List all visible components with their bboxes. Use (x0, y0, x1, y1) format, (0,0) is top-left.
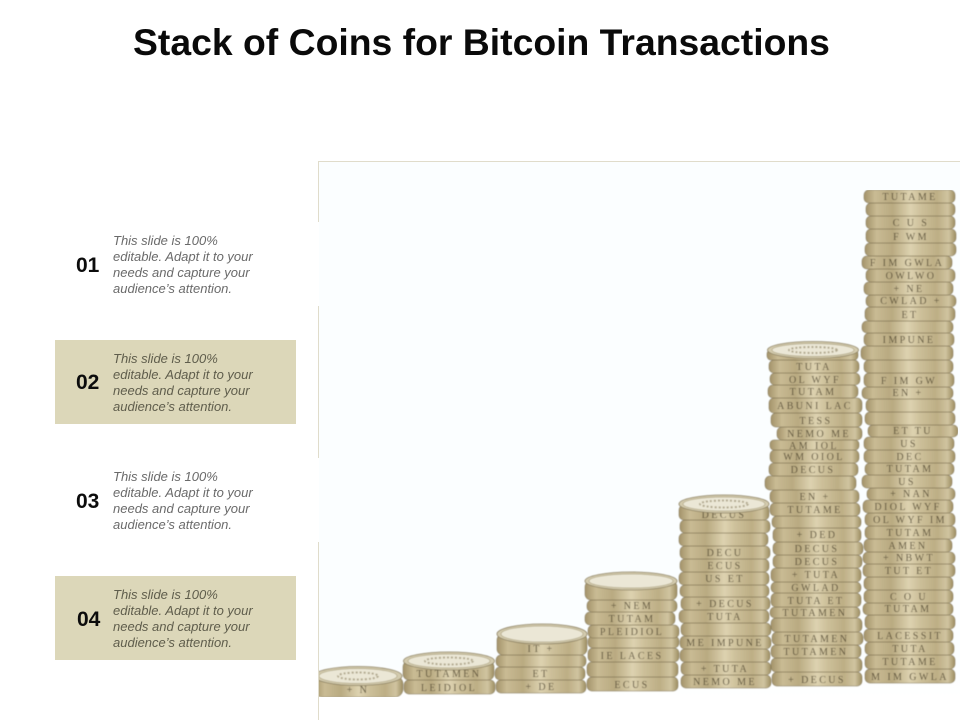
coin stack 7: M IM GWLA (871, 672, 949, 683)
number 04: 04 (77, 608, 100, 631)
row 04 (55, 576, 296, 660)
coin stack 7: TUT ET (885, 566, 933, 577)
coin stack 7: ET (901, 310, 919, 321)
description 01: This slide is 100% (113, 233, 218, 248)
description 04: This slide is 100% (113, 587, 218, 602)
coin stack 5: ECUS (707, 561, 743, 572)
coin stack 6: AM IOL (789, 441, 839, 452)
coin stack 6 (765, 342, 863, 686)
coin stack 6: TUTA ET (788, 596, 844, 607)
coin stack 4 (585, 572, 679, 691)
coin stack 7: + NAN (890, 489, 932, 500)
coin stack 4: + NEM (611, 601, 653, 612)
description 02: needs and capture your (113, 383, 250, 398)
coin stack 7: US (898, 477, 916, 488)
description 01 (113, 233, 254, 296)
coin stack 6: TUTAMEN (784, 647, 848, 658)
coin stack 7: TUTAM (885, 604, 931, 615)
description 04: editable. Adapt it to your (113, 603, 253, 618)
description 03: needs and capture your (113, 501, 250, 516)
coin stack 4: IE LACES (601, 651, 663, 662)
description 03: This slide is 100% (113, 469, 218, 484)
coin stack 5: DECUS (702, 510, 746, 521)
coin stack 7: AMEN (888, 541, 928, 552)
photo panel: coin stacks (318, 161, 960, 720)
coin stack 6: TUTAM (790, 387, 836, 398)
coin stack 7: TUTAM (887, 464, 933, 475)
description 04: needs and capture your (113, 619, 250, 634)
coin stack 6: DECUS (795, 557, 839, 568)
coin stack 6: OL WYF (789, 375, 841, 386)
description 04 (113, 587, 254, 650)
coin stack 7: TUTAM (887, 528, 933, 539)
coin stack 5: DECU (707, 548, 743, 559)
coin stack 7: OWLWO (886, 271, 936, 282)
description 02 (113, 351, 254, 414)
description 02: audience’s attention. (113, 399, 232, 414)
coin stack 7: LACESSIT (877, 631, 943, 642)
coin stack 5: US ET (705, 574, 745, 585)
coin stack 7: F IM GWLA (870, 258, 944, 269)
coin stack 7: ET TU (893, 426, 933, 437)
coin stack 7: US (900, 439, 918, 450)
number 03: 03 (76, 490, 99, 513)
coin stack 5: ME IMPUNE (686, 638, 764, 649)
coin stack 6: TUTA (796, 362, 832, 373)
coin stack 5: + TUTA (701, 664, 749, 675)
coin stack 2: LEIDIOL (421, 683, 477, 694)
coin stack 7: DIOL WYF (874, 502, 942, 513)
coin stack 4: PLEIDIOL (600, 627, 664, 638)
number 02: 02 (76, 371, 99, 394)
coin stack 7 (861, 190, 958, 683)
coin stack 6: GWLAD (791, 583, 841, 594)
coin stack 6: DECUS (795, 544, 839, 555)
coin stack 7: C U S (893, 218, 929, 229)
description 03: audience’s attention. (113, 517, 232, 532)
coin stack 3: + DE (525, 682, 557, 693)
description 03: editable. Adapt it to your (113, 485, 253, 500)
coin stack 6: WM OIOL (783, 452, 845, 463)
description 04: audience’s attention. (113, 635, 232, 650)
coin stack 6: DECUS (791, 465, 835, 476)
title: Stack of Coins for Bitcoin Transactions (133, 21, 830, 63)
number 01: 01 (76, 254, 99, 277)
coin stack 7: C O U (890, 592, 928, 603)
coin stack 7: DEC (896, 452, 924, 463)
coin stack 7: + NBWT (883, 553, 935, 564)
coin stack 7: EN + (892, 388, 924, 399)
row 01 (76, 233, 254, 296)
coin stack 7: F IM GW (881, 376, 937, 387)
coin stack 3: IT + (528, 644, 554, 655)
description 02: editable. Adapt it to your (113, 367, 253, 382)
description 01: editable. Adapt it to your (113, 249, 253, 264)
coin stack 7: F WM (893, 232, 929, 243)
coin stack 7: OL WYF IM (873, 515, 947, 526)
coin stack 5: NEMO ME (693, 677, 757, 688)
coin stack 4: TUTAM (609, 614, 655, 625)
coin stack 4: ECUS (614, 680, 650, 691)
coin stack 5: TUTA (707, 612, 743, 623)
coin stack 6: TESS (800, 416, 832, 427)
coin stack 2: TUTAMEN (417, 669, 481, 680)
coin stack 6: NEMO ME (787, 429, 851, 440)
coin stack 7: IMPUNE (883, 335, 935, 346)
coin stack 6: EN + (799, 492, 831, 503)
coin stack 2 (403, 652, 495, 694)
coin stack 5: + DECUS (696, 599, 754, 610)
description 01: audience’s attention. (113, 281, 232, 296)
coin stack 6: + DECUS (788, 675, 846, 686)
coin stack 6: + DED (797, 530, 837, 541)
coin stack 1: + N (347, 685, 369, 696)
description 01: needs and capture your (113, 265, 250, 280)
coin stack 7: + NE (893, 284, 925, 295)
coin stack 3 (495, 624, 587, 693)
description 02: This slide is 100% (113, 351, 218, 366)
coin stack 7: TUTAME (882, 657, 938, 668)
coin stack 6: TUTAMEN (783, 608, 847, 619)
coin stack 3: ET (532, 669, 550, 680)
coin stack 7: TUTA (892, 644, 928, 655)
description 03 (113, 469, 254, 532)
coin stack 6: TUTAME (787, 505, 843, 516)
coin stack 6: ABUNI LAC (777, 401, 853, 412)
coin stack 6: TUTAMEN (785, 634, 849, 645)
row 03 (76, 469, 254, 532)
coin stack 6: + TUTA (792, 570, 840, 581)
coin stack 7: CWLAD + (880, 296, 942, 307)
coin stack 1 (314, 666, 403, 697)
coin stack 7: TUTAME (882, 192, 938, 203)
coin stack 5 (679, 495, 771, 688)
row 02 (55, 340, 296, 424)
